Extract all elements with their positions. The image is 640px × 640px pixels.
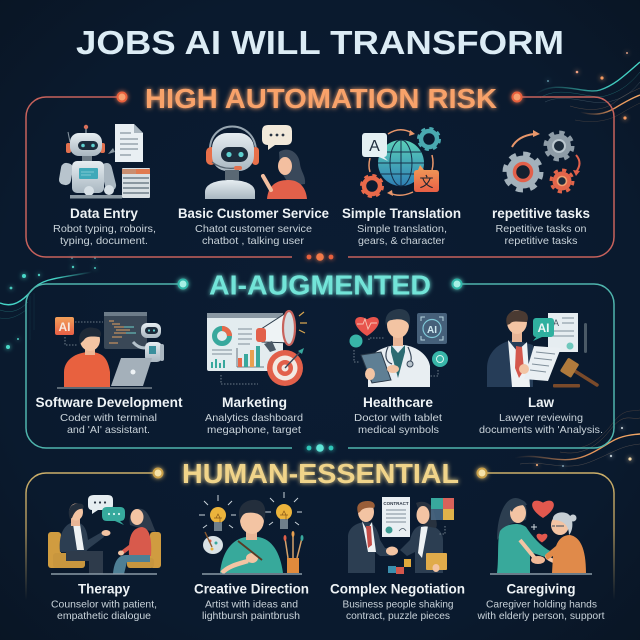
label block: repetitive tasks: Repetitive tasks on <box>496 223 587 235</box>
icon: repetitive gears <box>505 130 580 192</box>
heading node left <box>178 280 188 288</box>
label block: marketing <box>205 394 303 436</box>
icon: coder with ai assistant: AI <box>58 320 70 334</box>
title: JOBS AI WILL TRANSFORM <box>76 24 564 61</box>
panel connector dots <box>307 253 333 261</box>
icon: translation globe: 文 <box>420 172 434 192</box>
label block: simple translation: Simple translation, <box>357 223 447 235</box>
label block: complex negotiation: Complex Negotiation <box>330 580 465 596</box>
icon: lawyer with documents: A <box>553 318 559 328</box>
icon: caregiver with elder <box>490 498 592 574</box>
decorative wave: bottom right <box>515 410 640 466</box>
icon: lawyer with documents: AI <box>538 321 550 335</box>
panel connector dots <box>307 444 333 452</box>
decorative wave: left <box>0 272 92 350</box>
heading: high automation risk: HIGH AUTOMATION RISK <box>145 83 497 114</box>
label block: creative direction: Creative Direction <box>194 580 309 596</box>
panel: high automation risk <box>26 83 614 261</box>
label block: therapy: empathetic dialogue <box>57 610 151 622</box>
decorative stars <box>6 52 632 467</box>
label block: creative direction: Artist with ideas and <box>205 598 298 610</box>
label block: software development: Coder with terminal <box>60 412 157 424</box>
label block: data entry <box>53 205 156 247</box>
label block: complex negotiation: Business people shaking <box>342 598 454 610</box>
panel: ai-augmented <box>26 270 614 452</box>
label block: creative direction <box>194 580 309 622</box>
panel frame <box>26 97 614 257</box>
icon: therapy session <box>48 495 161 574</box>
heading node right <box>512 92 522 102</box>
label block: complex negotiation: contract, puzzle pieces <box>346 610 450 622</box>
icon: translation globe <box>362 128 440 196</box>
label block: basic customer service <box>178 205 329 247</box>
label block: caregiving <box>477 580 605 622</box>
icon: coder with ai assistant <box>55 312 164 388</box>
label block: caregiving: with elderly person, support <box>477 610 605 622</box>
label block: repetitive tasks: repetitive tasks <box>492 205 590 221</box>
label block: therapy: Therapy <box>78 580 130 596</box>
label block: caregiving: Caregiving <box>506 580 576 596</box>
heading node right <box>478 468 486 478</box>
label block: basic customer service: Basic Customer Service <box>178 205 329 221</box>
label block: healthcare: Healthcare <box>363 394 433 410</box>
label block: basic customer service: chatbot , talking user <box>202 235 305 247</box>
label block: marketing: Analytics dashboard <box>205 412 303 424</box>
label block: simple translation <box>342 205 461 247</box>
label block: simple translation: Simple Translation <box>342 205 461 221</box>
label block: law: Lawyer reviewing <box>499 412 583 424</box>
label block: software development: Software Development <box>36 394 183 410</box>
icon: chatbot with user <box>205 125 307 199</box>
icon: negotiation handshake <box>348 497 454 574</box>
label block: data entry: Data Entry <box>70 205 138 221</box>
heading node left <box>118 92 126 102</box>
label block: healthcare: medical symbols <box>358 424 439 436</box>
label block: caregiving: Caregiver holding hands <box>486 598 597 610</box>
label block: law <box>479 394 603 436</box>
label block: law: Law <box>528 394 554 410</box>
icon: negotiation handshake: CONTRACT <box>383 501 409 506</box>
decorative wave: top right <box>535 62 640 122</box>
icon: marketing dashboard <box>207 311 307 386</box>
label block: marketing: megaphone, target <box>207 424 301 436</box>
label block: therapy: Counselor with patient, <box>51 598 157 610</box>
icon: creative director <box>199 492 304 574</box>
label block: marketing: Marketing <box>222 394 287 410</box>
label block: healthcare: Doctor with tablet <box>354 412 442 424</box>
label block: data entry: typing, document. <box>60 235 148 247</box>
icon: doctor with tablet: AI <box>427 325 437 336</box>
panel: human-essential <box>26 458 614 622</box>
heading: human-essential: HUMAN-ESSENTIAL <box>182 458 459 489</box>
icon: lawyer with documents <box>487 310 597 388</box>
heading node right <box>452 280 462 288</box>
panel frame <box>26 284 614 448</box>
panel frame <box>26 473 614 600</box>
icon: robot data entry <box>58 124 150 198</box>
label block: simple translation: gears, & character <box>358 235 446 247</box>
label block: repetitive tasks <box>492 205 590 247</box>
label block: software development <box>36 394 183 436</box>
label block: software development: and 'AI' assistant. <box>67 424 150 436</box>
label block: therapy <box>51 580 157 622</box>
icon: translation globe: A <box>369 138 380 155</box>
label block: law: documents with 'Analysis. <box>479 424 603 436</box>
heading: ai-augmented: AI-AUGMENTED <box>209 270 431 300</box>
label block: healthcare <box>354 394 442 436</box>
icon: doctor with tablet <box>350 309 448 387</box>
label block: repetitive tasks: repetitive tasks <box>504 235 578 247</box>
label block: data entry: Robot typing, roboirs, <box>53 223 156 235</box>
label block: basic customer service: Chatot customer service <box>195 223 312 235</box>
label block: complex negotiation <box>330 580 465 622</box>
heading node left <box>154 468 162 478</box>
label block: creative direction: lightbursh paintbrush <box>202 610 300 622</box>
